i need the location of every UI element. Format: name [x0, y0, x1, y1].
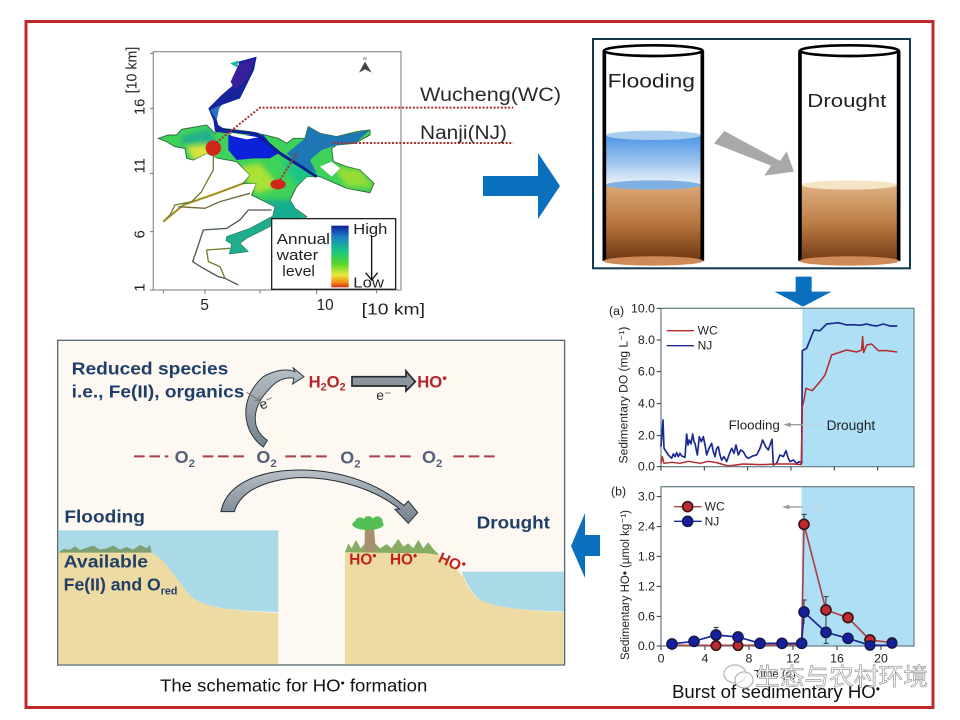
- flooding column: [603, 45, 703, 266]
- y axis numbers: 0.0: [638, 639, 655, 653]
- oxygen interface line: 2: [189, 458, 195, 470]
- flooding drought labels: Drought: [827, 418, 875, 433]
- panel: schematic of HO formation: [58, 340, 565, 695]
- flooding water: [59, 530, 278, 612]
- watermark: 生态与农村环境: [755, 664, 928, 691]
- y axis numbers: 2.4: [638, 520, 655, 534]
- series: NJ: [667, 607, 897, 650]
- label: H2O2: 2: [340, 381, 346, 393]
- y axis numbers: 6.0: [638, 365, 655, 379]
- drought shading: [802, 308, 914, 467]
- y axis labels: 6: [132, 230, 148, 238]
- leader lines: [213, 108, 513, 180]
- legend: [667, 324, 718, 353]
- lower lake arm: [226, 217, 277, 254]
- label: HO radical: HO: [417, 373, 442, 392]
- icon: chat bubbles: [724, 665, 753, 688]
- y axis numbers: 4.0: [638, 397, 655, 411]
- curved arrow: flooding to drought: [221, 470, 418, 523]
- panel: lake map: [125, 47, 513, 318]
- label: reduced species: [72, 358, 244, 402]
- map axes box: [153, 52, 401, 290]
- y axis title: Sedimentary HO• (µmol kg⁻¹): [618, 510, 632, 660]
- north arrow: N: [363, 56, 367, 61]
- north arrow: [359, 56, 372, 73]
- legend: [674, 500, 725, 528]
- panel border: [593, 39, 910, 268]
- label: Nanji: Nanji(NJ): [420, 123, 507, 144]
- y axis numbers: [631, 301, 655, 474]
- y axis numbers: [638, 490, 655, 653]
- y axis labels: 1: [132, 283, 148, 292]
- oxygen interface line: O: [422, 447, 436, 467]
- y axis labels: 11: [132, 158, 148, 173]
- error bars: [714, 514, 829, 643]
- label: drought: Drought: [477, 512, 550, 532]
- caption: burst of sedimentary HO: Burst of sedimentary HO: [672, 681, 875, 702]
- electron transfer: [247, 392, 277, 413]
- panel letter b: (b): [611, 484, 626, 498]
- x axis title: Time (d): [754, 668, 796, 680]
- y axis numbers: 10.0: [631, 301, 655, 315]
- label: HO radicals on soil: •: [372, 549, 377, 563]
- flooding column: Flooding: [608, 72, 695, 93]
- y axis numbers: 3.0: [638, 490, 655, 504]
- y axis numbers: 8.0: [638, 333, 655, 347]
- plot frame: [661, 487, 914, 646]
- legend: WC: [698, 324, 718, 338]
- drought soil: [345, 552, 564, 664]
- label: electron: e⁻: [376, 387, 391, 403]
- label: available Fe(II): [64, 551, 177, 598]
- map legend: [272, 219, 396, 291]
- x axis numbers: 0: [658, 651, 665, 665]
- label: reduced species: i.e., Fe(II), organics: [72, 382, 244, 402]
- panel: flooding and drought columns: [593, 39, 910, 307]
- legend: NJ: [705, 514, 719, 528]
- label: HO radicals on soil: [349, 547, 469, 576]
- axis ticks: [657, 308, 878, 471]
- label: available Fe(II): Fe(II) and O: [64, 575, 161, 595]
- arrow: H2O2 to HO: [352, 371, 415, 391]
- lake body: [158, 57, 374, 254]
- x axis numbers: 4: [702, 651, 709, 665]
- label: H2O2: H: [309, 373, 321, 392]
- y axis labels: 16: [132, 99, 148, 115]
- map tick marks: [150, 53, 377, 294]
- x axis labels: 10: [317, 297, 334, 314]
- legend: NJ: [698, 339, 712, 353]
- map legend: Low: [353, 275, 384, 291]
- label: HO radicals on soil: HO: [390, 552, 413, 569]
- series: WC: [661, 337, 897, 466]
- flooding drought labels: Flooding: [729, 417, 780, 432]
- arrow: charts to schematic: [571, 513, 600, 578]
- y axis labels: [10 km]: [125, 47, 141, 93]
- drought shading: [802, 487, 914, 646]
- label: H2O2: 2: [321, 381, 327, 393]
- x axis labels: [200, 297, 425, 318]
- caption: schematic: The schematic for HO: [160, 675, 335, 695]
- axis ticks: [657, 497, 881, 650]
- map legend: High: [353, 222, 387, 238]
- x axis numbers: 8: [746, 651, 753, 665]
- panel background: [58, 340, 565, 665]
- site marker: Wucheng: [206, 140, 221, 156]
- map legend: level: [282, 264, 315, 280]
- chart (a): sedimentary DO: [609, 301, 914, 474]
- site marker: Nanji: [270, 179, 286, 189]
- label: HO radicals on soil: •: [459, 557, 469, 571]
- flooding soil: [59, 552, 278, 664]
- oxygen interface line: [134, 447, 497, 471]
- caption: schematic: •: [341, 678, 345, 690]
- x axis numbers: 16: [830, 651, 844, 665]
- arrow: flooding to drought: [714, 131, 794, 176]
- drought grass: [345, 539, 439, 555]
- drought column: [799, 45, 899, 266]
- map legend: Annual: [277, 232, 330, 248]
- series: WC: [672, 519, 897, 650]
- y axis labels: [125, 47, 148, 292]
- x axis numbers: 20: [874, 651, 888, 665]
- oxygen interface line: O: [175, 447, 189, 467]
- label: HO radicals on soil: •: [413, 549, 417, 563]
- y axis numbers: 0.6: [638, 609, 655, 623]
- oxygen interface line: O: [340, 448, 354, 468]
- flooding drought labels: [729, 417, 875, 433]
- label: reduced species: Reduced species: [72, 358, 229, 378]
- oxygen interface line: O: [256, 447, 270, 467]
- x axis numbers: 12: [786, 651, 800, 665]
- x axis numbers: [658, 651, 888, 665]
- drought column: Drought: [807, 90, 887, 111]
- label: available Fe(II): Available: [64, 551, 148, 571]
- arrow: map to columns: [483, 153, 560, 219]
- label: Wucheng: Wucheng(WC): [420, 85, 561, 106]
- drought water: [462, 572, 564, 612]
- label: HO radicals on soil: HO: [349, 552, 372, 569]
- x axis labels: [10 km]: [362, 301, 425, 318]
- electron transfer: e⁻: [256, 392, 277, 413]
- label: available Fe(II): red: [161, 586, 177, 598]
- x axis labels: 5: [200, 297, 209, 314]
- label: HO radicals on soil: HO: [436, 550, 464, 575]
- oxygen interface line: 2: [354, 459, 361, 471]
- label: flooding: Flooding: [64, 507, 145, 527]
- label: HO radical: •: [442, 370, 447, 385]
- y axis numbers: 1.2: [638, 579, 655, 593]
- y axis numbers: 1.8: [638, 549, 655, 563]
- series: NJ: [661, 323, 897, 465]
- caption: schematic: formation: [345, 675, 427, 695]
- arrow: columns to charts: [774, 277, 832, 307]
- legend: WC: [705, 500, 725, 514]
- icon: tree: [352, 516, 384, 552]
- label: H2O2: O: [327, 373, 340, 392]
- oxygen interface line: 2: [270, 458, 277, 470]
- flooding drought arrows: [782, 505, 824, 509]
- y axis numbers: 0.0: [638, 460, 655, 474]
- panel letter a: (a): [609, 304, 624, 318]
- plot frame: [661, 308, 914, 467]
- curved arrow: to H2O2: [246, 367, 304, 447]
- chart (b): sedimentary HO: [611, 484, 914, 680]
- oxygen interface line: 2: [436, 458, 442, 470]
- flooding grass: [59, 545, 152, 553]
- y axis title: Sedimentary DO (mg L⁻¹): [616, 327, 630, 463]
- caption: burst of sedimentary HO: •: [876, 682, 880, 696]
- y axis numbers: 2.0: [638, 429, 655, 443]
- map legend: water: [275, 248, 318, 264]
- tributary rivers: [163, 157, 272, 285]
